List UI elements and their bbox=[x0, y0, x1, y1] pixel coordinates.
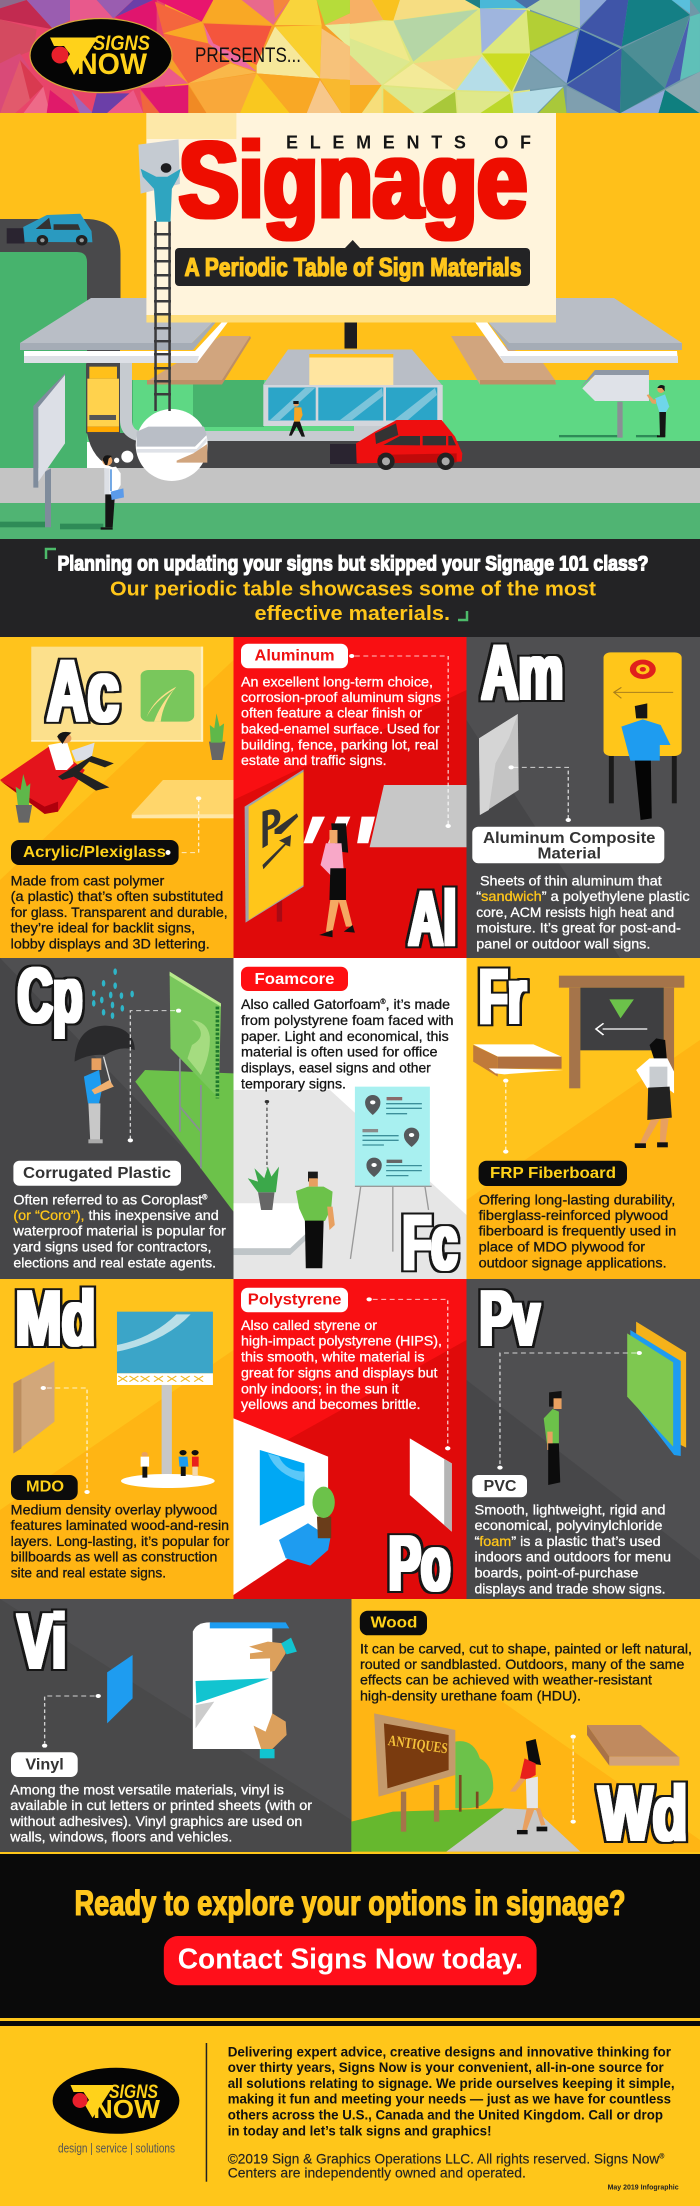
text: Polystyrene: only indoors; in the sun it bbox=[241, 1380, 399, 1396]
text: Acrylic: (a plastic) that’s often substituted bbox=[11, 888, 223, 904]
panel: acrylic bbox=[0, 637, 234, 958]
element symbol Po: Po bbox=[388, 1519, 450, 1607]
intro line yellow bbox=[110, 578, 596, 625]
label: Corrugated Plastic: Corrugated Plastic bbox=[23, 1165, 171, 1182]
panel: foamcore bbox=[233, 958, 466, 1286]
footer logo bbox=[53, 2068, 179, 2134]
tagline: design | service | solutions bbox=[58, 2141, 175, 2156]
man on ladder holding panel bbox=[138, 139, 181, 222]
ground bbox=[0, 219, 700, 539]
direction sign bbox=[559, 370, 658, 438]
label: Aluminum: Aluminum bbox=[254, 648, 334, 664]
text: Polystyrene: yellows and becomes brittle. bbox=[241, 1396, 420, 1412]
label: Foamcore: Foamcore bbox=[254, 971, 335, 988]
text: Wood: routed or sandblasted. Outdoors, many of the same bbox=[360, 1656, 685, 1672]
text: Vinyl: available in cut letters or printed sheets (with or bbox=[10, 1797, 312, 1813]
label: PVC: PVC bbox=[484, 1478, 516, 1495]
text: Aluminum bbox=[241, 673, 441, 768]
call to action band bbox=[0, 1852, 700, 2026]
text: Corrugated: Often referred to as Coroplast ® bbox=[13, 1191, 208, 1207]
label: ACM: Material bbox=[538, 846, 601, 862]
text: Foamcore: Also called Gatorfoam®, it’s made bbox=[241, 996, 450, 1012]
text: MDO: Medium density overlay plywood bbox=[11, 1501, 217, 1517]
antiques sign text: ANTIQUES bbox=[387, 1733, 449, 1757]
text: FRP: outdoor signage applications. bbox=[479, 1254, 667, 1270]
label: Acrylic: Acrylic/Plexiglass bbox=[23, 844, 166, 861]
text: ACM: “sandwich” a polyethylene plastic bbox=[476, 888, 690, 904]
label: Wood: Wood bbox=[370, 1615, 417, 1632]
polystyrene illustration bbox=[233, 1297, 452, 1595]
label: Polystyrene bbox=[241, 1288, 348, 1312]
text: PVC: “foam” is a plastic that’s used bbox=[474, 1533, 661, 1549]
acrylic illustration bbox=[0, 647, 233, 853]
text: Polystyrene: high-impact polystyrene (HIPS), bbox=[241, 1333, 442, 1349]
text: Aluminum: building, fence, parking lot, real bbox=[241, 736, 438, 752]
label: Polystyrene: Polystyrene bbox=[248, 1292, 342, 1308]
text: Vinyl bbox=[9, 1781, 312, 1845]
label: MDO bbox=[11, 1475, 78, 1500]
intro line yellow: effective materials. bbox=[254, 602, 450, 625]
label: FRP Fiberboard bbox=[479, 1161, 627, 1186]
text: ACM: Sheets of thin aluminum that bbox=[480, 872, 662, 888]
copyright: Centers are independently owned and operated. bbox=[228, 2165, 526, 2181]
PVC illustration bbox=[497, 1322, 686, 1485]
person walking bbox=[289, 401, 305, 437]
text: Vinyl: Among the most versatile materials, vinyl is bbox=[10, 1781, 284, 1797]
text: Vinyl: without adhesives). Vinyl graphics are used on bbox=[9, 1813, 302, 1829]
text: MDO: site and real estate signs. bbox=[11, 1565, 166, 1581]
vinyl illustration bbox=[42, 1622, 297, 1758]
text: Corrugated: (or “Coro”), this inexpensive and bbox=[13, 1207, 219, 1223]
text: Aluminum: An excellent long-term choice, bbox=[241, 673, 433, 689]
text: Acrylic bbox=[11, 872, 228, 952]
label: Foamcore bbox=[241, 967, 348, 991]
man thinking bbox=[101, 451, 133, 530]
text: FRP bbox=[479, 1191, 676, 1270]
intro band bbox=[0, 539, 700, 637]
copyright: ©2019 Sign & Graphics Operations LLC. All rights reserved. Signs Now® bbox=[228, 2151, 665, 2167]
text: Aluminum: corrosion-proof aluminum signs bbox=[241, 689, 441, 705]
text: Corrugated bbox=[12, 1191, 226, 1270]
text: ACM: core, ACM resists high heat and bbox=[476, 904, 674, 920]
element symbol Fr: Fr bbox=[479, 952, 526, 1040]
element symbol Cp: Cp bbox=[18, 951, 82, 1039]
roadside billboard bbox=[0, 373, 103, 529]
text: Wood: effects can be achieved with weather-resistant bbox=[360, 1672, 652, 1688]
about text: over thirty years, Signs Now is your convenient, all-in-one source for bbox=[228, 2059, 664, 2075]
label: PVC bbox=[472, 1475, 527, 1497]
text: Foamcore: paper. Light and economical, this bbox=[241, 1028, 449, 1044]
logo: Signs Now bbox=[30, 18, 172, 92]
logo: Signs Now: SIGNS bbox=[93, 32, 150, 55]
subtitle banner: A Periodic Table of Sign Materials bbox=[184, 252, 522, 282]
text: Vinyl: walls, windows, floors and vehicles. bbox=[9, 1829, 232, 1845]
right canopy bbox=[451, 298, 682, 384]
logo: Signs Now: NOW bbox=[77, 48, 148, 81]
bracket top-left bbox=[46, 549, 56, 559]
about text: Delivering expert advice, creative designs and innovative thinking for bbox=[228, 2043, 672, 2059]
blue car bbox=[7, 214, 92, 245]
text: Corrugated: yard signs used for contractors, bbox=[13, 1239, 211, 1255]
text: PVC: Smooth, lightweight, rigid and bbox=[474, 1501, 666, 1517]
text: PVC: boards, point-of-purchase bbox=[474, 1565, 639, 1581]
text: Foamcore: material is often used for office bbox=[241, 1044, 438, 1060]
fiberboard illustration bbox=[473, 976, 684, 1154]
panel: polystyrene bbox=[233, 1279, 466, 1607]
text: PVC: displays and trade show signs. bbox=[474, 1580, 666, 1596]
text: ACM bbox=[476, 872, 690, 952]
red car bbox=[330, 420, 462, 470]
text: Foamcore bbox=[241, 996, 454, 1091]
about text: others across the U.S., Canada and the United Kingdom. Call or drop bbox=[228, 2106, 663, 2122]
text: Wood: It can be carved, cut to shape, painted or left natural, bbox=[360, 1640, 692, 1656]
footer bbox=[0, 2026, 700, 2206]
text: Corrugated: elections and real estate agents. bbox=[13, 1254, 216, 1270]
panel: aluminum composite bbox=[466, 628, 700, 958]
panel: PVC bbox=[466, 1274, 700, 1599]
label: Aluminum bbox=[241, 644, 348, 668]
text: MDO bbox=[11, 1501, 230, 1581]
about text: in today and let’s talk signs and graphics! bbox=[228, 2122, 491, 2138]
aluminum illustration bbox=[245, 654, 466, 937]
panel: wood bbox=[351, 1599, 700, 1857]
intro line yellow: Our periodic table showcases some of the most bbox=[110, 578, 596, 600]
about text bbox=[228, 2043, 675, 2138]
yellow bus bbox=[86, 363, 120, 433]
building bbox=[263, 350, 443, 426]
text: Acrylic: for glass. Transparent and durable, bbox=[11, 904, 228, 920]
element symbol Al: Al bbox=[408, 874, 456, 962]
label: Vinyl: Vinyl bbox=[25, 1756, 64, 1774]
text: PVC bbox=[474, 1501, 671, 1596]
text: MDO: features laminated wood-and-resin bbox=[11, 1517, 229, 1533]
element symbol Pv: Pv bbox=[480, 1274, 540, 1362]
text: PVC: economical, polyvinylchloride bbox=[474, 1517, 663, 1533]
text: MDO: layers. Long-lasting, it’s popular for bbox=[11, 1533, 230, 1549]
label: MDO: MDO bbox=[26, 1479, 64, 1496]
about text: making it fun and meeting your needs — just as we have for countless bbox=[228, 2091, 671, 2107]
bracket bottom-right bbox=[458, 611, 467, 620]
text: Foamcore: from polystyrene foam faced with bbox=[241, 1012, 454, 1028]
footer logo: SIGNS bbox=[109, 2082, 158, 2103]
element symbol Vi: Vi bbox=[18, 1597, 66, 1685]
magnifier bbox=[136, 409, 208, 481]
hero illustration bbox=[0, 113, 700, 539]
text: FRP: place of MDO plywood for bbox=[479, 1239, 645, 1255]
text: Polystyrene: this smooth, white material is bbox=[241, 1349, 424, 1365]
label: ACM bbox=[472, 827, 664, 863]
MDO illustration bbox=[13, 1312, 215, 1494]
element symbol Md: Md bbox=[16, 1274, 96, 1362]
about text: all solutions relating to signage. We pride ourselves keeping it simple, bbox=[228, 2075, 675, 2091]
left canopy bbox=[20, 298, 251, 384]
text: Polystyrene bbox=[241, 1317, 442, 1412]
ladder bbox=[154, 221, 171, 411]
text: Acrylic: Made from cast polymer bbox=[11, 872, 165, 888]
presents text: PRESENTS... bbox=[195, 44, 301, 67]
text: Wood: high-density urethane foam (HDU). bbox=[360, 1687, 581, 1703]
element symbol Fc: Fc bbox=[402, 1198, 458, 1286]
text: Foamcore: temporary signs. bbox=[241, 1075, 346, 1091]
CTA button bbox=[164, 1936, 537, 1985]
panel: vinyl bbox=[0, 1597, 352, 1852]
text: ACM: moisture. It’s great for post-and- bbox=[476, 920, 681, 936]
panel: MDO bbox=[0, 1274, 234, 1599]
text: Acrylic: lobby displays and 3D lettering. bbox=[11, 936, 210, 952]
panel: corrugated plastic bbox=[0, 951, 234, 1279]
text: Polystyrene: great for signs and displays but bbox=[241, 1364, 438, 1380]
text: Wood bbox=[360, 1640, 692, 1703]
text: Corrugated: waterproof material is popular for bbox=[12, 1223, 226, 1239]
label: Acrylic bbox=[11, 840, 179, 865]
title: elements of: ELEMENTS OF bbox=[286, 132, 531, 152]
text: FRP: Offering long-lasting durability, bbox=[479, 1191, 675, 1207]
text: Foamcore: displays, easel signs and other bbox=[241, 1060, 431, 1076]
text: Aluminum: baked-enamel surface. Used for bbox=[241, 721, 440, 737]
text: Acrylic: they’re ideal for backlit signs, bbox=[11, 920, 195, 936]
element symbol Ac: Ac bbox=[47, 643, 119, 740]
text: ACM: panel or outdoor wall signs. bbox=[476, 936, 650, 952]
title: Signage: Signage bbox=[179, 119, 527, 240]
person at sign bbox=[647, 385, 669, 437]
text: Polystyrene: Also called styrene or bbox=[241, 1317, 377, 1333]
label: Corrugated Plastic bbox=[13, 1161, 181, 1186]
ACM illustration bbox=[479, 652, 682, 822]
text: Aluminum: estate and traffic signs. bbox=[241, 752, 387, 768]
element symbol Am: Am bbox=[482, 628, 564, 716]
wood illustration bbox=[351, 1713, 679, 1852]
date note: May 2019 Infographic bbox=[608, 2182, 679, 2191]
text: FRP: fiberglass-reinforced plywood bbox=[479, 1207, 668, 1223]
label: FRP Fiberboard: FRP Fiberboard bbox=[490, 1165, 616, 1182]
subtitle banner bbox=[175, 240, 530, 286]
text: Aluminum: often feature a clear finish or bbox=[241, 705, 422, 721]
text: FRP: fiberboard is frequently used in bbox=[479, 1223, 676, 1239]
header polygon banner bbox=[0, 0, 700, 113]
CTA button: Contact Signs Now today. bbox=[178, 1943, 523, 1975]
panel: aluminum bbox=[234, 637, 466, 962]
label: Vinyl bbox=[11, 1752, 78, 1777]
footer logo: NOW bbox=[93, 2094, 160, 2124]
panel: FRP fiberboard bbox=[466, 952, 700, 1279]
label: ACM: Aluminum Composite bbox=[483, 830, 656, 847]
foamcore illustration bbox=[233, 1087, 432, 1268]
label: Wood bbox=[360, 1611, 427, 1635]
billboard bbox=[146, 113, 556, 348]
text: PVC: indoors and outdoors for menu bbox=[474, 1549, 671, 1565]
copyright bbox=[228, 2151, 665, 2181]
corrugated illustration bbox=[75, 968, 233, 1212]
text: MDO: billboards as well as construction bbox=[11, 1549, 217, 1565]
